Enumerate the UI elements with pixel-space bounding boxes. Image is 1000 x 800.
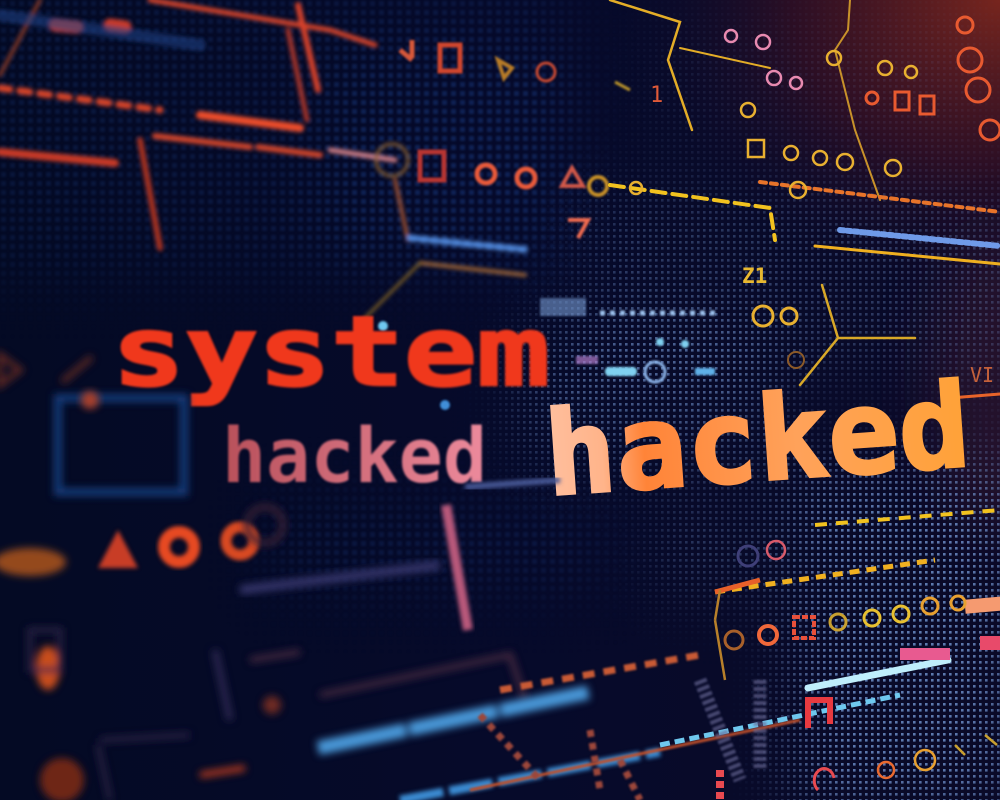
small mid-right glyphs (650, 83, 994, 387)
left blurred panel and icons (0, 355, 560, 630)
bottom-left blurred circuits (30, 630, 525, 800)
small mid-right glyphs: Z1 (742, 264, 767, 288)
lower-right circuit cluster (715, 510, 1000, 800)
small mid-right glyphs: VI (970, 363, 994, 387)
blurred top glyphs (400, 40, 630, 238)
mid blue labels (378, 298, 715, 410)
headline: system: system (112, 296, 550, 408)
bottom blue bars (318, 655, 948, 800)
headline: hacked: hacked (541, 359, 974, 523)
subheading: blurred hacked: hacked (222, 411, 487, 500)
top-left blurred circuit lines (0, 0, 530, 318)
top-right yellow circuits and binary (610, 0, 1000, 398)
small mid-right glyphs: 1 (650, 83, 663, 108)
